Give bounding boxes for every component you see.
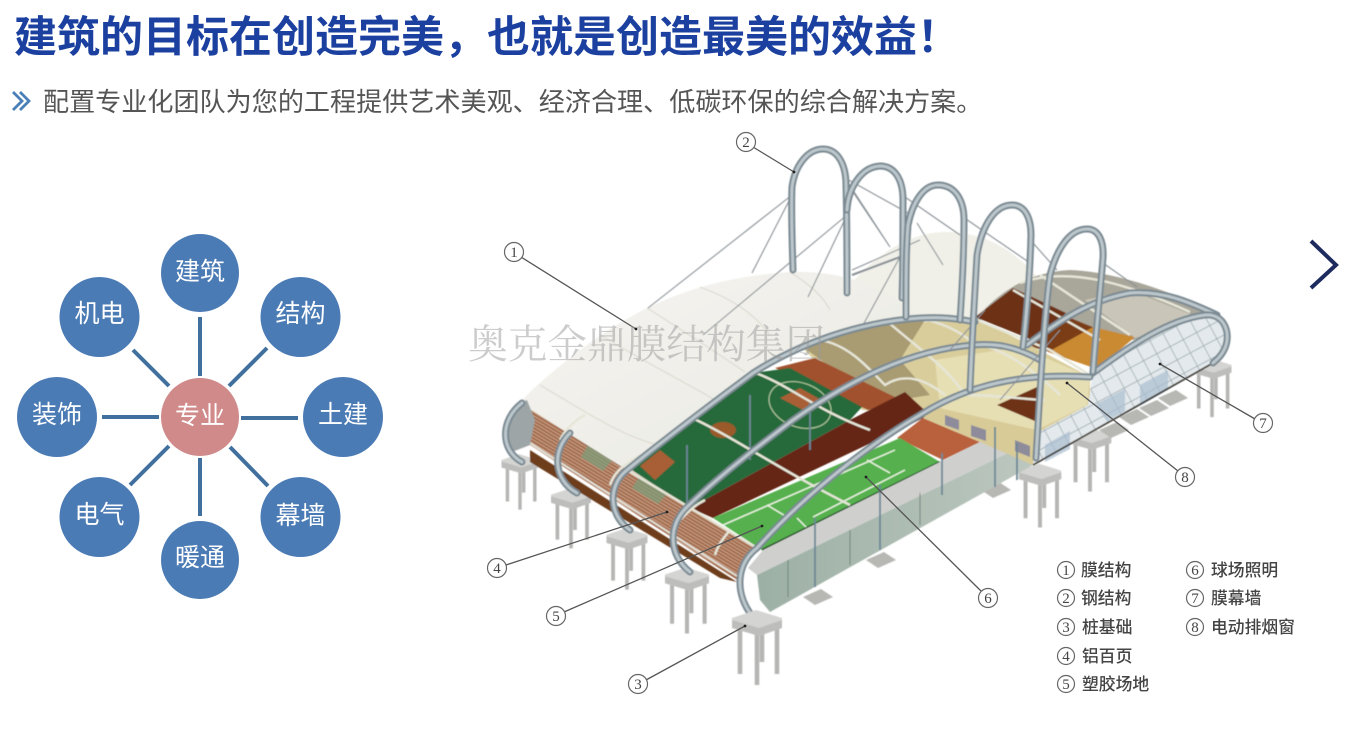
callout 2: 2 bbox=[742, 135, 750, 151]
legend item 3: 3 bbox=[1062, 620, 1070, 636]
main steel arches bbox=[506, 293, 1227, 617]
terracotta floor lower bbox=[897, 418, 980, 460]
callout 1: 1 bbox=[510, 245, 518, 261]
legend item 7 bbox=[1186, 589, 1262, 608]
watermark: 奥克金鼎膜结构集团 bbox=[468, 323, 825, 367]
basketball court bbox=[632, 368, 862, 508]
thin roof ribs bbox=[560, 275, 1190, 555]
node: 建筑: 建筑 bbox=[175, 258, 225, 286]
subtitle: 配置专业化团队为您的工程提供艺术美观、经济合理、低碳环保的综合解决方案。 bbox=[43, 87, 982, 117]
pile foundations bbox=[502, 359, 1232, 633]
title: 建筑的目标在创造完美，也就是创造最美的效益！ bbox=[14, 14, 960, 62]
courtyard bbox=[997, 387, 1037, 422]
legend bbox=[1058, 561, 1295, 694]
callout 5 bbox=[546, 525, 763, 626]
callout 8 bbox=[1066, 382, 1194, 486]
far translucent membrane bbox=[850, 232, 1040, 325]
legend item 6: 6 bbox=[1191, 563, 1199, 579]
legend item 3: 桩基础 bbox=[1082, 618, 1132, 637]
membrane roof bbox=[505, 272, 920, 470]
node: 结构: 结构 bbox=[275, 300, 326, 328]
glass fence bbox=[757, 452, 1033, 612]
arch 1 foot cap bbox=[732, 610, 782, 685]
node: 幕墙: 幕墙 bbox=[275, 502, 326, 530]
wood floors bbox=[975, 288, 1200, 369]
callout 5: 5 bbox=[552, 609, 560, 625]
legend item 7: 7 bbox=[1191, 591, 1199, 607]
legend item 3 bbox=[1058, 618, 1132, 637]
glass curtain end wall bbox=[1033, 316, 1225, 465]
node: 机电: 机电 bbox=[74, 300, 125, 328]
callout 6: 6 bbox=[984, 591, 992, 607]
node: 幕墙 bbox=[260, 477, 340, 557]
dark brown track bbox=[690, 392, 930, 518]
beige side wall with windows bbox=[923, 408, 1037, 465]
light poles bbox=[687, 395, 1017, 587]
callout 6 bbox=[865, 476, 998, 608]
callout 3 bbox=[628, 625, 746, 694]
upright arch 1 bbox=[792, 149, 847, 293]
legend item 4: 4 bbox=[1062, 649, 1070, 665]
back wall bbox=[975, 270, 1217, 340]
node: 电气 bbox=[60, 477, 140, 557]
connector spokes bbox=[102, 317, 298, 516]
icon: double chevron bullet bbox=[13, 92, 29, 110]
legend item 2: 2 bbox=[1062, 591, 1070, 607]
upright arch 2 bbox=[847, 166, 903, 298]
legend item 4: 铝百页 bbox=[1082, 647, 1132, 666]
icon: next arrow bbox=[1311, 241, 1336, 288]
legend item 2: 钢结构 bbox=[1081, 589, 1131, 608]
node: 建筑 bbox=[161, 234, 239, 312]
callout 4: 4 bbox=[493, 561, 501, 577]
node: 专业 centre: 专业 bbox=[175, 402, 225, 430]
legend item 8: 8 bbox=[1191, 620, 1199, 636]
node: 装饰 bbox=[17, 377, 97, 457]
callout 7: 7 bbox=[1259, 416, 1267, 432]
legend item 8: 电动排烟窗 bbox=[1211, 618, 1295, 637]
upright arch 3 bbox=[906, 185, 964, 320]
concrete sill bbox=[748, 442, 1010, 575]
legend item 4 bbox=[1058, 647, 1132, 666]
legend item 1 bbox=[1058, 561, 1131, 580]
legend item 6: 球场照明 bbox=[1211, 561, 1278, 580]
interior base bbox=[800, 318, 1090, 433]
callout 3: 3 bbox=[634, 677, 642, 693]
node: 结构 bbox=[260, 277, 340, 357]
badminton court bbox=[713, 438, 940, 550]
legend item 1: 膜结构 bbox=[1081, 561, 1131, 580]
node: 暖通: 暖通 bbox=[175, 544, 225, 572]
upright arch 4 bbox=[970, 205, 1031, 390]
callout 8: 8 bbox=[1181, 470, 1189, 486]
legend item 7: 膜幕墙 bbox=[1211, 589, 1262, 608]
callout 4 bbox=[488, 511, 668, 578]
callout 7 bbox=[1159, 363, 1272, 432]
legend item 5: 5 bbox=[1062, 677, 1070, 693]
node: 机电 bbox=[60, 277, 140, 357]
node: 专业 centre bbox=[161, 378, 239, 456]
diagram: professional disciplines hub bbox=[17, 234, 383, 599]
legend item 1: 1 bbox=[1062, 563, 1070, 579]
legend item 2 bbox=[1058, 589, 1131, 608]
node: 土建 bbox=[303, 377, 383, 457]
upright arch 5 bbox=[1036, 229, 1103, 458]
suspension cables bbox=[648, 178, 1137, 400]
node: 电气: 电气 bbox=[74, 501, 125, 529]
node: 装饰: 装饰 bbox=[32, 401, 82, 429]
louvre band bbox=[522, 403, 757, 582]
callout 2 bbox=[736, 132, 795, 173]
illustration: membrane structure building bbox=[502, 149, 1232, 685]
node: 土建: 土建 bbox=[318, 401, 368, 429]
terracotta floor upper bbox=[775, 358, 905, 410]
legend item 5: 塑胶场地 bbox=[1082, 675, 1149, 694]
node: 暖通 bbox=[161, 521, 239, 599]
callout 1 bbox=[504, 242, 637, 330]
